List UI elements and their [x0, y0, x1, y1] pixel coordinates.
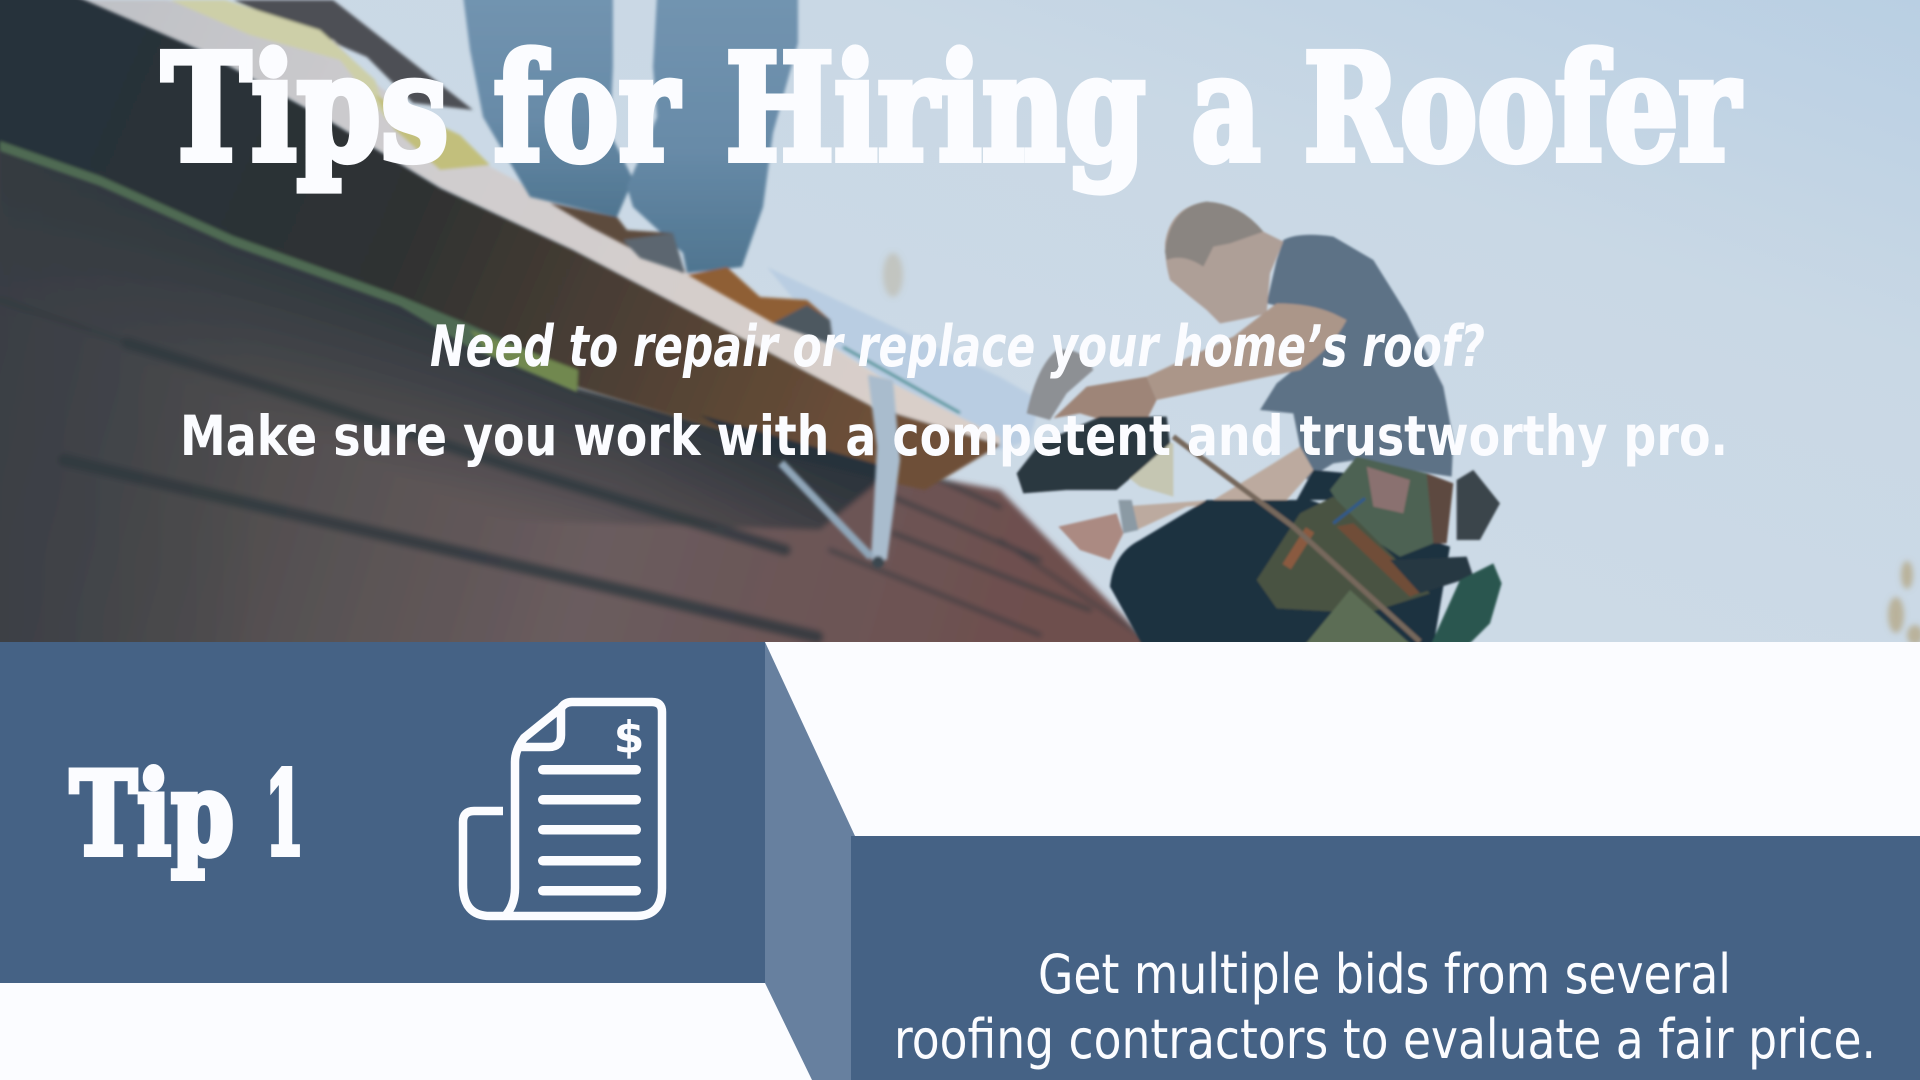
photo roof shingles — [0, 130, 1148, 660]
title: Tips — [162, 22, 448, 194]
photo sky — [0, 0, 1920, 642]
photo legs and boots — [463, 0, 833, 345]
photo foliage — [883, 253, 1920, 645]
roofer nail gun — [1027, 350, 1093, 420]
photo dark shingles and foam — [73, 0, 1000, 445]
roofer arms — [1147, 303, 1347, 400]
photo sheathing panel — [767, 267, 1040, 450]
title: for — [494, 22, 680, 194]
panel: tip 1 heading — [0, 642, 765, 983]
photo roofer — [1017, 202, 1502, 647]
roofer head — [1165, 202, 1283, 323]
title: Hiring — [726, 22, 1146, 194]
title: a — [1192, 22, 1260, 194]
icon: invoice with dollar sign — [463, 702, 662, 916]
subtitle question: Need to repair or replace your home’s roof? — [430, 314, 1485, 380]
panel: tip 1 heading: 1 — [265, 747, 304, 881]
dollar sign: $ — [614, 712, 644, 763]
hero photo: roofer working on a roof — [0, 0, 1920, 660]
tip 1 label: Tip — [70, 747, 234, 881]
roofer tool belt — [1330, 457, 1437, 557]
roofer shirt — [1260, 235, 1453, 480]
title: Roofer — [1304, 22, 1741, 194]
photo metal strap — [781, 375, 900, 568]
ribbon fold — [765, 642, 855, 1080]
photo fascia board — [0, 0, 1000, 490]
tip 1 text line 1: Get multiple bids from several — [1038, 943, 1731, 1006]
roofer trousers — [1110, 500, 1450, 647]
panel: tip 1 description — [851, 836, 1920, 1080]
title — [162, 22, 1741, 194]
